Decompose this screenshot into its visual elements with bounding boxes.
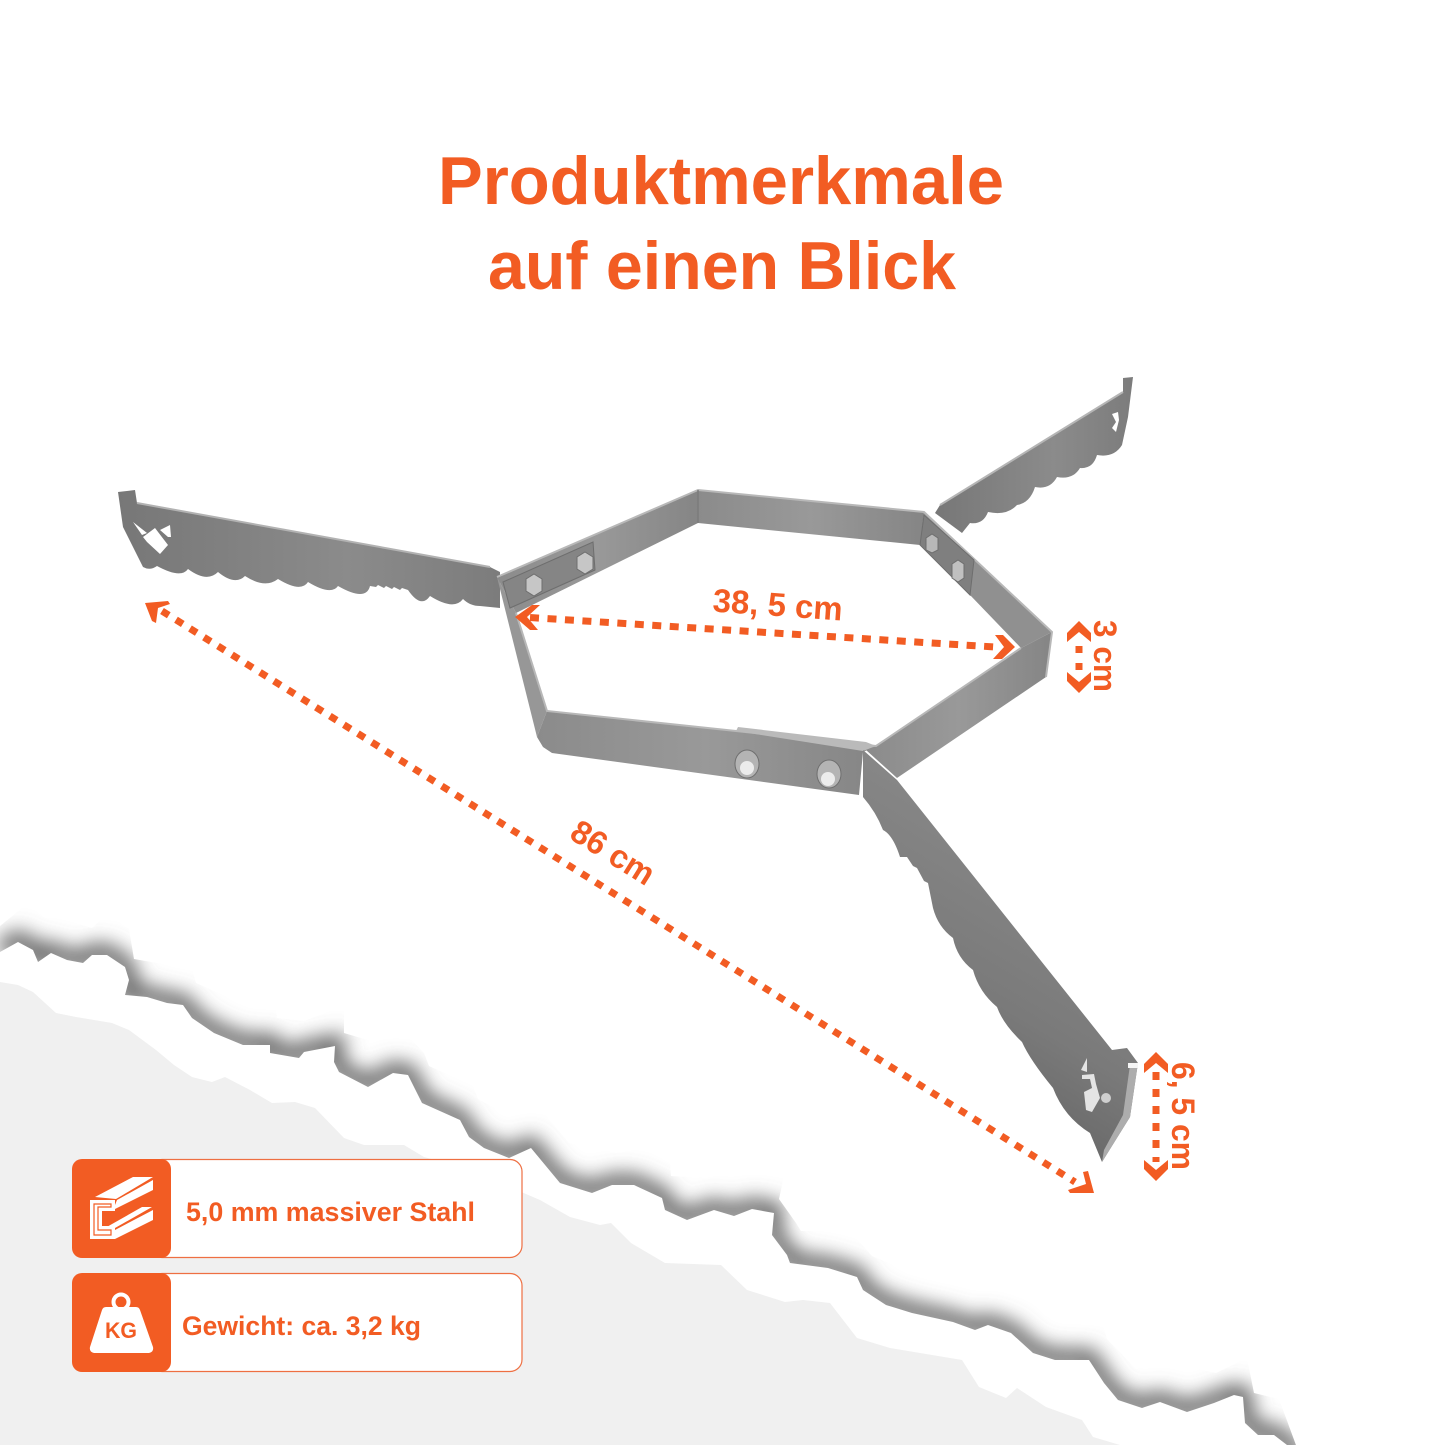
- dimension arrow: 3 cm: [1067, 620, 1123, 693]
- feature card: steel thickness: [72, 1159, 522, 1258]
- label: 6, 5 cm: 6, 5 cm: [1165, 1062, 1201, 1170]
- text: Gewicht: Gewicht: ca. 3,2 kg: [182, 1311, 421, 1341]
- product: steel hexagon tree stand: [118, 377, 1138, 1162]
- text: 5,0 mm massiver Stahl: 5,0 mm massiver Stahl: [186, 1197, 475, 1227]
- feature card: weight: [72, 1273, 522, 1372]
- bolts: [526, 534, 964, 788]
- title: [438, 143, 1004, 304]
- icon: weight KG: KG: [105, 1318, 137, 1343]
- upper right arm: [935, 377, 1133, 533]
- label: 3 cm: 3 cm: [1087, 620, 1123, 692]
- title: auf einen Blick: [488, 228, 956, 304]
- lower right arm: [863, 750, 1138, 1162]
- torn paper background: [0, 940, 1300, 1445]
- icon: weight KG: [72, 1273, 171, 1372]
- dimension arrow: 6,5 cm: [1144, 1052, 1201, 1181]
- icon: steel profile: [72, 1159, 171, 1258]
- dimension arrow: 86 cm: [145, 601, 1094, 1193]
- bracket plates: [503, 515, 974, 751]
- dimension arrow: 38,5 cm: [515, 582, 1015, 659]
- left arm: [118, 490, 500, 608]
- label: 38, 5 cm: 38, 5 cm: [712, 582, 844, 628]
- hexagon back bands: [497, 490, 1052, 795]
- label: 86 cm: 86 cm: [564, 812, 662, 892]
- title: Produktmerkmale: [438, 143, 1004, 219]
